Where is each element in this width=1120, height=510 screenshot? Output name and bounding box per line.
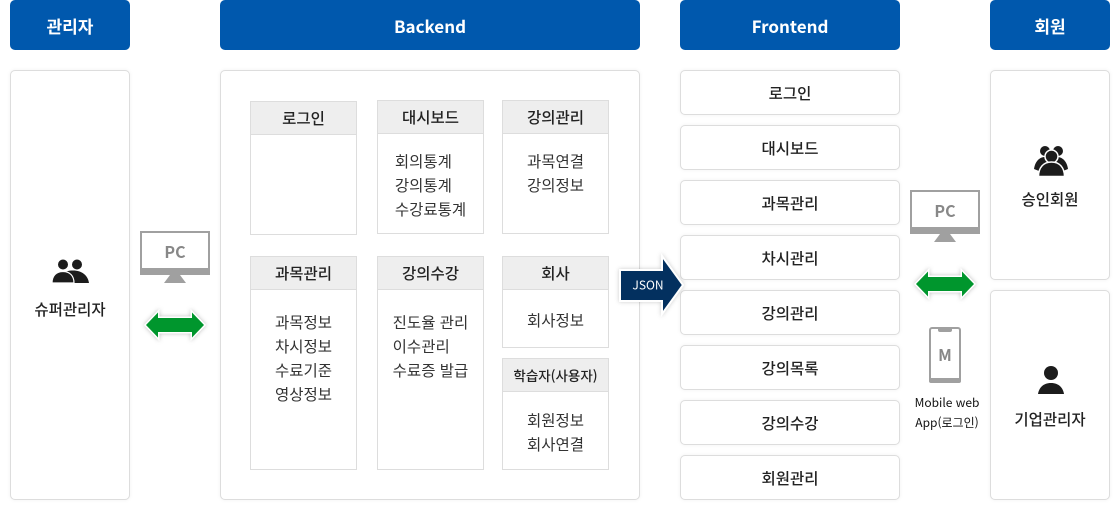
icon: PC monitor left (140, 231, 210, 283)
frontend item: 차시관리 (680, 235, 900, 280)
panel: 승인회원 (990, 70, 1110, 280)
module: 강의관리: 과목연결 (527, 150, 584, 172)
module: 대시보드 (377, 100, 484, 234)
icon: mobile: M (938, 342, 952, 366)
module: 대시보드: 회의통계 (395, 150, 452, 172)
frontend item: 과목관리: 과목관리 (761, 192, 819, 214)
module: 대시보드: 강의통계 (395, 174, 452, 196)
panel: admin (10, 70, 130, 500)
module: 과목관리 (250, 256, 357, 470)
module: 과목관리: 영상정보 (275, 383, 332, 405)
label: 슈퍼관리자: 슈퍼관리자 (34, 298, 106, 320)
module: 회사 (502, 256, 609, 348)
frontend item: 대시보드 (680, 125, 900, 170)
icon: PC monitor left: PC (164, 239, 186, 263)
module: 회사: 회사 (541, 262, 570, 284)
label: 기업관리자: 기업관리자 (1014, 408, 1086, 430)
module: 강의수강: 진도율 관리 (393, 311, 468, 333)
header: Frontend: Frontend (752, 13, 828, 38)
icon: two users (52, 260, 89, 283)
panel: backend (220, 70, 640, 500)
module: 강의수강: 이수관리 (393, 335, 450, 357)
frontend item: 강의수강: 강의수강 (761, 412, 819, 434)
icon: mobile (929, 327, 961, 383)
header: Backend (220, 0, 640, 50)
frontend item: 로그인 (680, 70, 900, 115)
module: 학습자(사용자): 회사연결 (527, 433, 584, 455)
icon: user group (1034, 146, 1068, 176)
module: 대시보드: 수강료통계 (395, 198, 466, 220)
module: 강의수강 (377, 256, 484, 470)
module: 회사: 회사정보 (527, 309, 584, 331)
label: Mobile web App (915, 394, 979, 431)
module: 강의관리: 강의관리 (527, 106, 584, 128)
frontend item: 강의관리: 강의관리 (761, 302, 819, 324)
module: 강의수강: 강의수강 (402, 262, 459, 284)
module: 대시보드: 대시보드 (402, 106, 459, 128)
module: 학습자(사용자): 학습자(사용자) (513, 365, 598, 385)
label: Mobile web App: App(로그인) (915, 414, 979, 431)
module: 과목관리: 차시정보 (275, 335, 332, 357)
frontend item: 차시관리: 차시관리 (761, 247, 819, 269)
frontend item: 강의관리 (680, 290, 900, 335)
arrow: JSON: JSON (632, 276, 664, 294)
icon: single user (1038, 366, 1064, 394)
arrow: bidirectional left (143, 308, 207, 342)
module: 과목관리: 과목관리 (275, 262, 332, 284)
frontend item: 강의목록 (680, 345, 900, 390)
module: 로그인: 로그인 (282, 107, 325, 129)
label: Mobile web App: Mobile web (915, 394, 979, 411)
icon: PC monitor right: PC (934, 198, 956, 222)
header: 관리자 (10, 0, 130, 50)
header: Frontend (680, 0, 900, 50)
module: 과목관리: 과목정보 (275, 311, 332, 333)
frontend item: 회원관리 (680, 455, 900, 500)
panel: 기업관리자 (990, 290, 1110, 500)
frontend item: 강의수강 (680, 400, 900, 445)
arrow: JSON (617, 254, 685, 316)
header: 관리자: 관리자 (47, 13, 93, 38)
module: 과목관리: 수료기준 (275, 359, 332, 381)
header: 회원: 회원 (1034, 13, 1066, 38)
module: 로그인 (250, 101, 357, 235)
frontend item: 회원관리: 회원관리 (761, 467, 819, 489)
module: 강의관리 (502, 100, 609, 234)
frontend item: 대시보드: 대시보드 (761, 137, 819, 159)
header: Backend: Backend (394, 13, 466, 38)
module: 강의관리: 강의정보 (527, 174, 584, 196)
frontend item: 로그인: 로그인 (769, 82, 811, 104)
module: 학습자(사용자): 회원정보 (527, 409, 584, 431)
module: 강의수강: 수료증 발급 (393, 359, 468, 381)
header: 회원 (990, 0, 1110, 50)
label: 승인회원: 승인회원 (1021, 188, 1079, 210)
arrow: bidirectional right (913, 268, 977, 300)
frontend item: 과목관리 (680, 180, 900, 225)
module: 학습자(사용자) (502, 358, 609, 470)
icon: PC monitor right (910, 190, 980, 242)
frontend item: 강의목록: 강의목록 (761, 357, 819, 379)
